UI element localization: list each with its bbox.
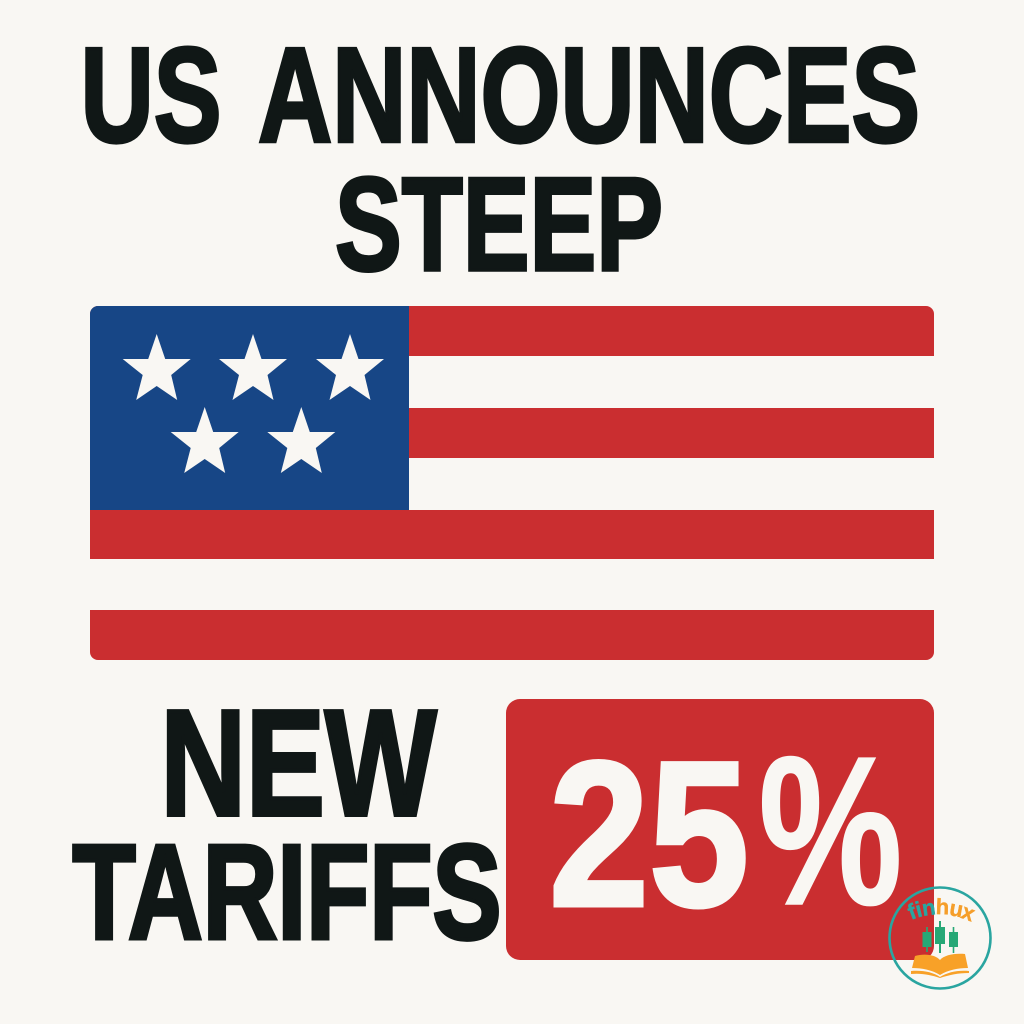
callout: 25 percent [506, 699, 934, 960]
heading: new tariffs: TARIFFS [72, 816, 502, 968]
logo: finhux [890, 888, 990, 988]
title: US announces steep: US [80, 20, 222, 170]
logo wordmark: n [920, 894, 937, 921]
flag stars [123, 334, 384, 473]
US flag [90, 306, 934, 660]
logo wordmark: u [948, 895, 965, 922]
logo wordmark: x [958, 899, 979, 927]
heading: new tariffs [72, 678, 502, 968]
logo wordmark: h [935, 894, 950, 919]
logo wordmark [904, 894, 979, 927]
logo candlesticks [922, 921, 958, 953]
title: US announces steep [80, 20, 920, 299]
heading: new tariffs: NEW [160, 678, 437, 847]
callout: 25 percent: % [758, 712, 902, 949]
logo wordmark: f [904, 898, 920, 925]
logo open book [911, 954, 969, 978]
callout: 25 percent: 25 [549, 718, 749, 950]
title: US announces steep: STEEP [335, 151, 663, 299]
logo wordmark: i [913, 897, 925, 922]
